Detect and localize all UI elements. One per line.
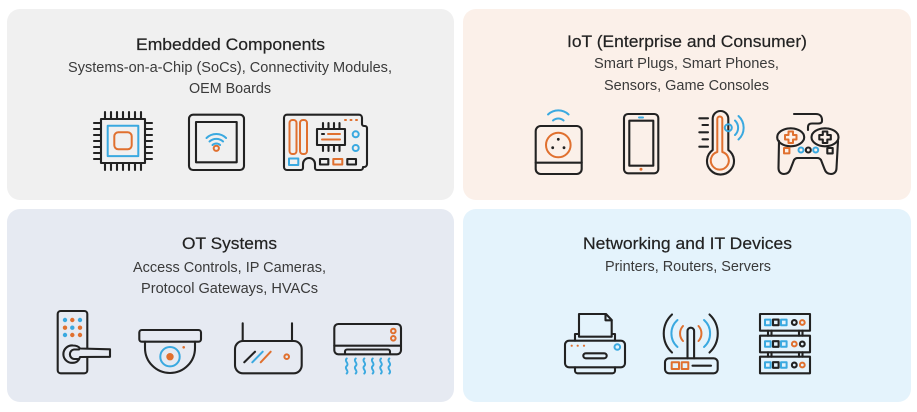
icon: printer <box>565 314 625 373</box>
panel: OT Systems <box>7 209 454 402</box>
icon: wifi module <box>189 115 244 170</box>
text: embedded line 2: OEM Boards <box>189 81 271 97</box>
icon: door lock <box>58 311 110 373</box>
icon: smart phone <box>624 114 658 173</box>
heading: Networking and IT Devices: Networking and IT Devices <box>583 234 792 253</box>
icon: server rack <box>760 314 810 373</box>
text: IoT line 1: Smart Plugs, Smart Phones, <box>594 56 779 72</box>
icon: wireless router <box>664 314 718 373</box>
text: embedded line 1: Systems-on-a-Chip (SoCs), Connectivity Modules, <box>68 60 392 76</box>
panel: IoT <box>463 9 911 200</box>
text: OT line 1: Access Controls, IP Cameras, <box>133 260 326 276</box>
panel: Embedded Components <box>7 9 454 200</box>
icon: smart plug <box>536 110 582 174</box>
panel: Networking and IT Devices <box>463 209 911 402</box>
icon: protocol gateway <box>235 323 302 373</box>
icon: game controller <box>777 114 838 174</box>
text: OT line 2: Protocol Gateways, HVACs <box>141 281 318 297</box>
heading: OT Systems: OT Systems <box>182 234 277 253</box>
heading: IoT (Enterprise and Consumer): IoT (Enterprise and Consumer) <box>567 32 807 51</box>
icon: dome camera <box>139 330 201 373</box>
text: IoT line 2: Sensors, Game Consoles <box>604 78 769 94</box>
icon: OEM board <box>284 115 367 170</box>
icon: chip <box>94 112 152 170</box>
text: networking line 1: Printers, Routers, Servers <box>605 259 771 275</box>
icon: temperature sensor <box>699 111 744 175</box>
heading: Embedded Components: Embedded Components <box>136 35 325 54</box>
icon: HVAC air conditioner <box>334 324 401 374</box>
